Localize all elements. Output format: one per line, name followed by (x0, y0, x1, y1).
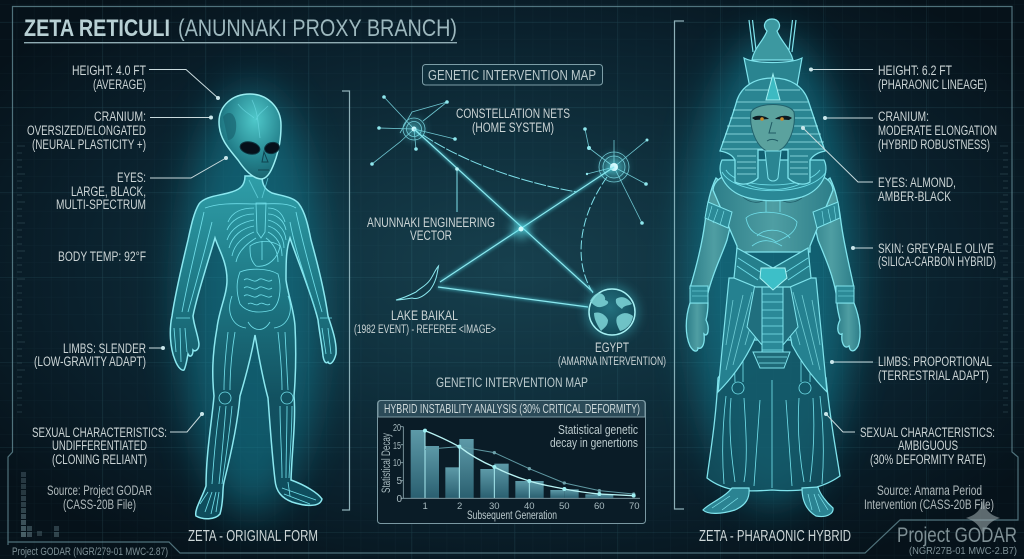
panel: genetic intervention map (354, 64, 666, 368)
nemes headdress (720, 74, 825, 184)
label: eyes (56, 170, 146, 212)
right annotation leaders (801, 68, 873, 432)
caption: original form: ZETA - ORIGINAL FORM (188, 528, 318, 545)
label: limbs (34, 341, 146, 369)
pharaoh face (751, 104, 794, 152)
label: height (878, 63, 987, 92)
label: sexual characteristics: AMBIGUOUS (898, 438, 958, 453)
icon: globe (585, 285, 639, 339)
pharaoh torso (713, 172, 833, 252)
axes (401, 427, 640, 498)
chart header: HYBRID INSTABILITY ANALYSIS (30% CRITICAL DEFORMITY) (384, 402, 640, 416)
title: ZETA RETICULI (24, 15, 170, 42)
label: sexual characteristics (860, 425, 995, 467)
label: eyes: AMBER-BLACK (878, 189, 951, 204)
label: skin (878, 241, 996, 269)
constellation B (583, 127, 648, 225)
right labels (699, 63, 1017, 557)
title: (ANUNNAKI PROXY BRANCH) (178, 15, 457, 42)
label: sexual characteristics: (30% DEFORMITY RATE) (870, 452, 986, 467)
label: sexual characteristics (32, 425, 167, 467)
y axis labels: 20 (393, 423, 401, 434)
y axis labels: 5 (396, 476, 402, 487)
footer brand right (897, 524, 1017, 557)
chart note (550, 422, 638, 450)
label: cranium: OVERSIZED/ELONGATED (27, 123, 146, 138)
pharaoh lower skirt (707, 340, 840, 491)
figure: Zeta pharaonic hybrid (686, 19, 860, 517)
label: egypt: EGYPT (595, 340, 629, 355)
collar (720, 160, 826, 201)
label: cranium (878, 109, 997, 152)
label: limbs: (LOW-GRAVITY ADAPT) (34, 354, 146, 369)
label: limbs (878, 354, 992, 383)
corner pixel bars (21, 472, 59, 537)
label: sexual characteristics: UNDIFFERENTIATED (52, 438, 147, 453)
map heading: GENETIC INTERVENTION MAP (428, 68, 596, 84)
x axis labels: 40 (524, 501, 535, 512)
drape pleats (726, 292, 820, 370)
beard (765, 151, 781, 181)
label: anunnaki engineering vector (367, 215, 495, 243)
label: lake baikal: LAKE BAIKAL (391, 308, 458, 323)
label: cranium: CRANIUM: (94, 109, 146, 124)
x axis labels: 1 (422, 501, 428, 512)
label: lake baikal (354, 308, 496, 336)
secondary heading: GENETIC INTERVENTION MAP (436, 375, 588, 390)
vector lines (414, 129, 614, 307)
label: egypt (558, 340, 666, 368)
caption: pharaonic hybrid: ZETA - PHARAONIC HYBRID (699, 528, 851, 545)
constellation A: home system (370, 95, 457, 166)
label: source (864, 483, 994, 512)
label: source: Source: Amarna Period (877, 483, 982, 498)
label: cranium (27, 109, 146, 152)
crown (744, 19, 802, 88)
alien skeleton (174, 203, 332, 514)
left labels (12, 63, 318, 558)
label: height: (AVERAGE) (93, 77, 146, 92)
map heading (422, 64, 602, 85)
label: height: HEIGHT: 4.0 FT (72, 63, 146, 78)
icon: lake baikal (396, 266, 438, 300)
label: anunnaki engineering vector: ANUNNAKI ENGINEERING (367, 215, 495, 230)
label: eyes (878, 175, 956, 204)
side scale ticks (17, 146, 1008, 412)
label: body temp: BODY TEMP: 92°F (58, 249, 146, 264)
alien head (219, 94, 281, 179)
label: source: (CASS-20B File) (63, 497, 136, 512)
label: sexual characteristics: (CLONING RELIANT) (52, 452, 147, 467)
star mark (966, 500, 1000, 537)
label: height (72, 63, 146, 92)
label: constellation nets (456, 106, 570, 135)
pharaoh arms and hands (686, 178, 860, 351)
alien body silhouette (170, 176, 336, 519)
x axis labels: 50 (559, 501, 570, 512)
panel: hybrid instability analysis chart (378, 400, 646, 524)
label: anunnaki engineering vector: VECTOR (410, 228, 452, 243)
hub node (512, 220, 530, 238)
chart note: Statistical genetic (558, 422, 638, 437)
label: eyes: LARGE, BLACK, (71, 184, 146, 199)
label: cranium: (NEURAL PLASTICITY +) (32, 137, 146, 152)
label: source: Source: Project GODAR (47, 483, 152, 498)
label: height: HEIGHT: 6.2 FT (878, 63, 952, 78)
left annotation leaders (149, 70, 228, 432)
pharaoh upper drape (718, 278, 827, 392)
title (24, 15, 457, 43)
chart header (378, 400, 645, 417)
pharaoh leg bones (723, 345, 823, 488)
label: limbs: (TERRESTRIAL ADAPT) (878, 368, 989, 383)
label: limbs: LIMBS: SLENDER (63, 341, 146, 356)
label: cranium: CRANIUM: (878, 109, 929, 124)
label: eyes: MULTI-SPECTRUM (56, 197, 146, 212)
chart note: decay in genertions (550, 435, 638, 450)
y axis labels (381, 423, 402, 505)
brackets (342, 21, 684, 510)
label: lake baikal: (1982 EVENT) - REFEREE <IMAGE> (354, 324, 496, 336)
figure: Zeta original form (170, 85, 336, 519)
footer code left: Project GODAR (NGR/279-01 MWC-2.87) (12, 546, 168, 558)
label: eyes: EYES: ALMOND, (878, 175, 956, 190)
pharaoh apron (747, 284, 798, 368)
y axis labels: 0 (396, 494, 402, 505)
pharaoh belt (734, 248, 811, 290)
y axis labels: 10 (393, 458, 401, 469)
y axis labels: Statistical Decay (381, 433, 393, 493)
label: constellation nets: CONSTELLATION NETS (456, 106, 570, 121)
x axis labels: 60 (594, 501, 605, 512)
pharaoh feet (703, 487, 833, 517)
x axis labels: 2 (457, 501, 462, 512)
label: sexual characteristics: SEXUAL CHARACTERISTICS: (32, 425, 167, 440)
x axis labels: 70 (629, 501, 640, 512)
pharaoh organs (742, 196, 804, 246)
x axis labels: Subsequent Generation (467, 510, 557, 522)
label: source (47, 483, 152, 512)
y axis labels: 15 (393, 441, 401, 452)
label: egypt: (AMARNA INTERVENTION) (558, 356, 666, 368)
armbands and bracers (690, 202, 854, 303)
decay curves (423, 429, 636, 498)
alien neck (249, 178, 268, 198)
bars (411, 430, 613, 498)
label: eyes: EYES: (117, 170, 146, 185)
x axis labels: 30 (489, 501, 500, 512)
x axis labels (422, 501, 640, 522)
label: constellation nets: (HOME SYSTEM) (472, 120, 554, 135)
